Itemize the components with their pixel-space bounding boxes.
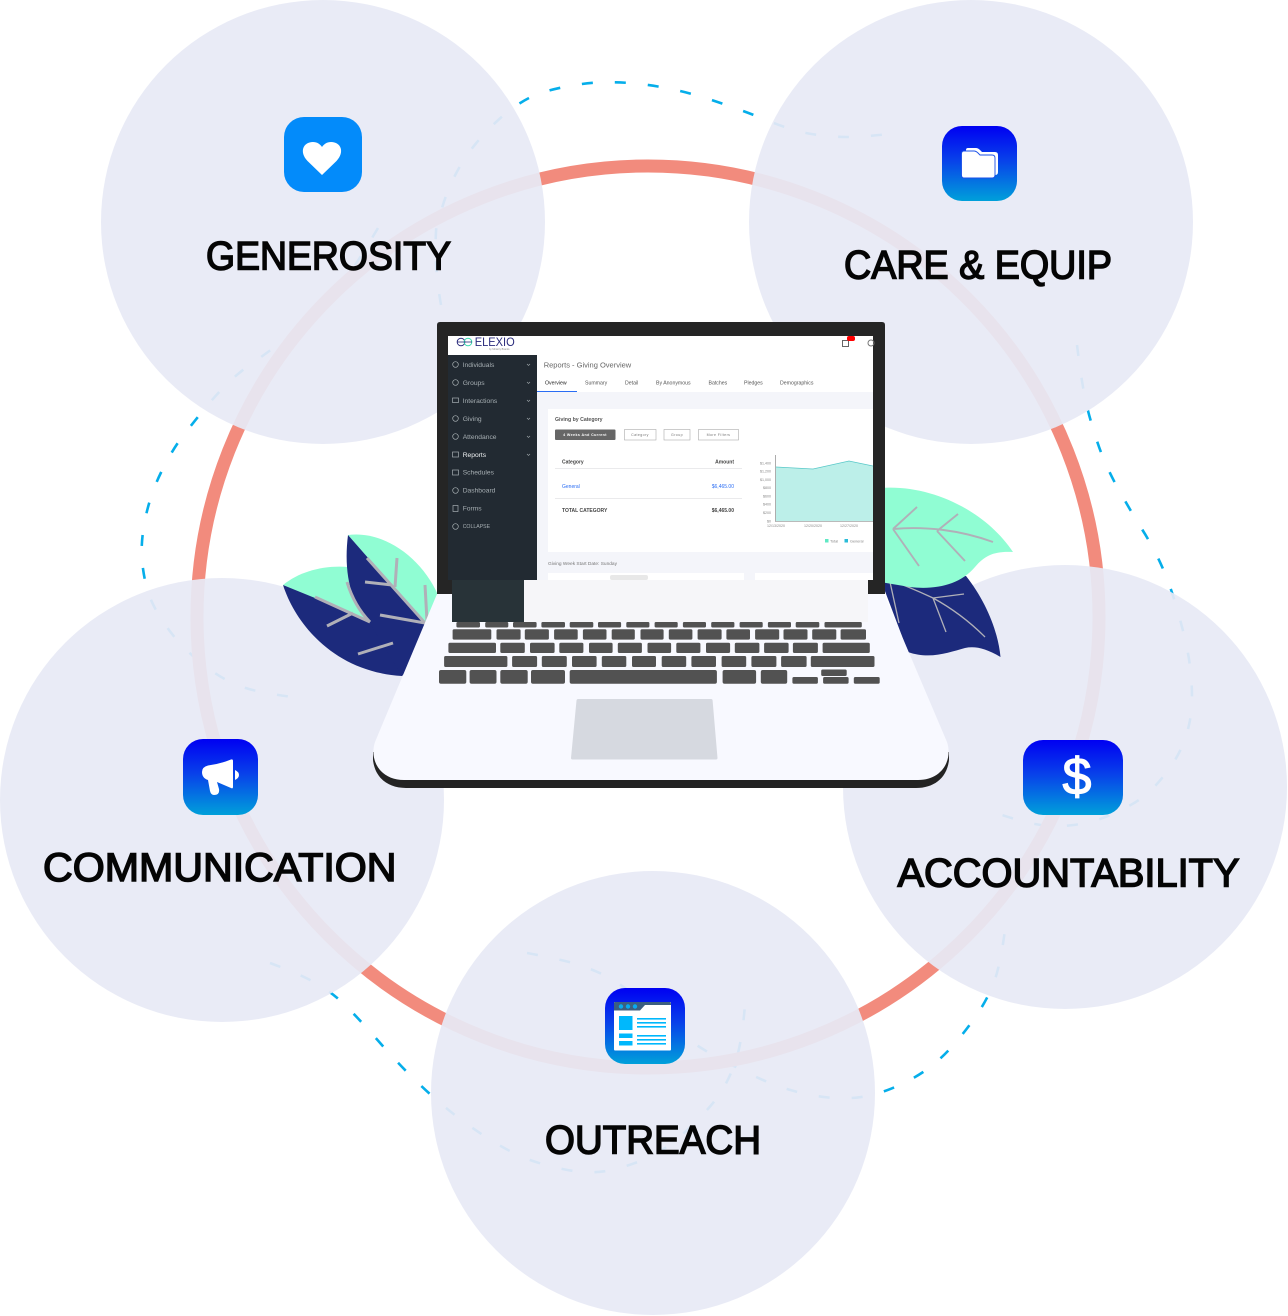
heading: outreach: OUTREACH xyxy=(545,1118,761,1162)
tabs: Demographics xyxy=(780,381,814,387)
dashed arc: right xyxy=(993,345,1192,826)
sidebar: Forms xyxy=(463,506,482,512)
icon: newsletter xyxy=(605,988,685,1064)
sidebar: Attendance xyxy=(463,434,497,441)
card: giving by category: General xyxy=(562,484,580,490)
week start note: Giving Week Start Date: Sunday xyxy=(548,561,618,567)
tabs: Pledges xyxy=(744,381,763,387)
area chart: $200 xyxy=(763,511,771,515)
notification icons xyxy=(842,336,874,346)
sidebar: Giving xyxy=(463,416,482,423)
tabs: Overview xyxy=(545,381,567,387)
keyboard top panel xyxy=(452,580,868,622)
logo: by Ministry Brands xyxy=(489,348,510,351)
sidebar: Dashboard xyxy=(463,488,496,494)
sidebar xyxy=(448,355,537,580)
circle: care and equip xyxy=(749,0,1193,444)
icon: heart xyxy=(284,117,362,192)
circle: communication xyxy=(0,578,444,1022)
tabs: Detail xyxy=(625,381,638,387)
card: giving by category: $6,465.00 xyxy=(712,484,734,490)
card: giving by category: Group xyxy=(671,433,683,437)
icon: dollar: $ xyxy=(1063,748,1092,806)
sidebar: Schedules xyxy=(463,470,495,476)
sidebar: Reports xyxy=(463,452,487,459)
area chart: $1,000 xyxy=(760,478,771,482)
heading: care and equip: CARE & EQUIP xyxy=(844,243,1112,287)
sidebar: Individuals xyxy=(463,362,495,369)
heading: accountability: ACCOUNTABILITY xyxy=(898,851,1240,895)
dashed arc: top xyxy=(436,82,898,305)
trackpad xyxy=(571,699,718,760)
card: giving by category: Category xyxy=(562,459,584,465)
dashed arc: left xyxy=(142,228,378,698)
sidebar: Interactions xyxy=(463,398,498,405)
logo: ELEXIO xyxy=(475,337,515,349)
area chart: 12/20/2020 xyxy=(804,524,822,528)
area chart: $1,400 xyxy=(760,461,771,465)
heading: generosity: GENEROSITY xyxy=(206,234,451,278)
card: giving by category: Giving by Category xyxy=(555,417,603,423)
sidebar: Groups xyxy=(463,380,485,387)
card: giving by category: More Filters xyxy=(707,433,730,437)
card: giving by category xyxy=(548,409,873,552)
keyboard keys xyxy=(439,622,880,684)
card: giving by category: Category xyxy=(631,433,649,437)
laptop xyxy=(373,322,949,788)
area chart: 12/13/2020 xyxy=(767,524,785,528)
area chart xyxy=(760,455,873,544)
tabs: Batches xyxy=(708,381,728,387)
area chart: $1,200 xyxy=(760,470,771,474)
lower cards xyxy=(548,573,873,580)
salmon ring xyxy=(197,166,1099,1068)
icon: dollar xyxy=(1023,740,1123,815)
page header: Reports - Giving Overview xyxy=(544,360,632,370)
area chart: $600 xyxy=(763,494,771,498)
heading: communication: COMMUNICATION xyxy=(43,846,396,890)
laptop base shadow xyxy=(373,752,949,788)
circle: outreach xyxy=(431,871,875,1315)
tabs: By Anonymous xyxy=(656,381,691,387)
area chart: $0 xyxy=(767,519,771,523)
circle: accountability xyxy=(843,565,1287,1009)
screen bezel xyxy=(437,322,885,594)
area chart: General xyxy=(850,540,864,544)
content background xyxy=(537,392,873,580)
laptop base xyxy=(373,594,949,780)
circle: generosity xyxy=(101,0,545,444)
tabs xyxy=(537,381,814,392)
card: giving by category: 4 Weeks And Current xyxy=(563,433,607,437)
sidebar: COLLAPSE xyxy=(463,524,491,530)
icon: megaphone xyxy=(183,739,258,815)
icon: folder xyxy=(942,126,1017,201)
dashed arc: bottom right xyxy=(527,930,1005,1098)
card: giving by category: $6,465.00 xyxy=(712,508,734,514)
dashed flower outline xyxy=(142,82,1192,1172)
right leaves xyxy=(880,488,1013,657)
logo xyxy=(457,337,515,351)
screen xyxy=(448,336,874,580)
tabs: Summary xyxy=(585,381,608,387)
card: giving by category: Amount xyxy=(715,459,734,465)
area chart: Total xyxy=(830,540,838,544)
area chart: $800 xyxy=(763,486,771,490)
area chart: $400 xyxy=(763,502,771,506)
dashed arc: bottom left xyxy=(270,963,745,1172)
area chart: 12/27/2020 xyxy=(840,524,858,528)
card: giving by category: TOTAL CATEGORY xyxy=(562,508,608,514)
left leaves xyxy=(283,534,440,676)
